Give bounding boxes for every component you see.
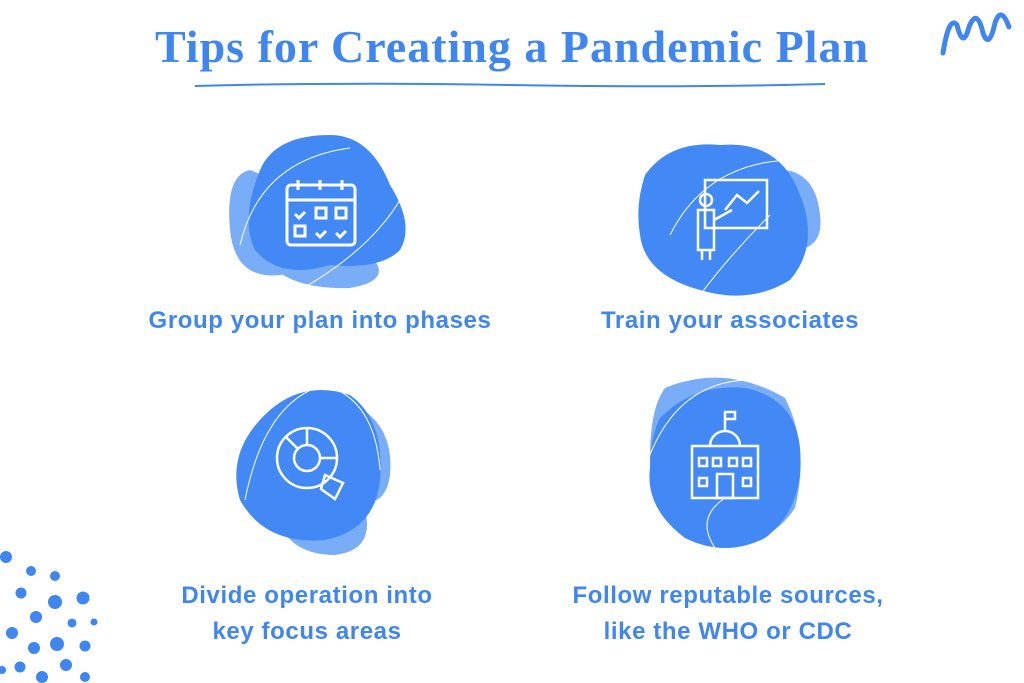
squiggle decoration: [940, 12, 1012, 56]
label: sources: like the WHO or CDC: [604, 618, 852, 645]
label: divide: key focus areas: [212, 618, 402, 645]
label: train: Train your associates: [601, 307, 859, 334]
title underline: [194, 82, 825, 88]
label: phases: Group your plan into phases: [149, 307, 491, 334]
label: sources: [572, 582, 884, 645]
label: divide: [181, 582, 433, 645]
dots decoration: [0, 551, 98, 683]
icon panel: training: [638, 144, 820, 296]
title: Tips for Creating a Pandemic Plan: [155, 21, 869, 72]
icon panel: building: [649, 378, 801, 548]
icon panel: pie chart: [236, 390, 390, 555]
icon panel: calendar: [229, 135, 406, 288]
label: sources: Follow reputable sources,: [572, 582, 884, 609]
label: divide: Divide operation into: [181, 582, 433, 609]
